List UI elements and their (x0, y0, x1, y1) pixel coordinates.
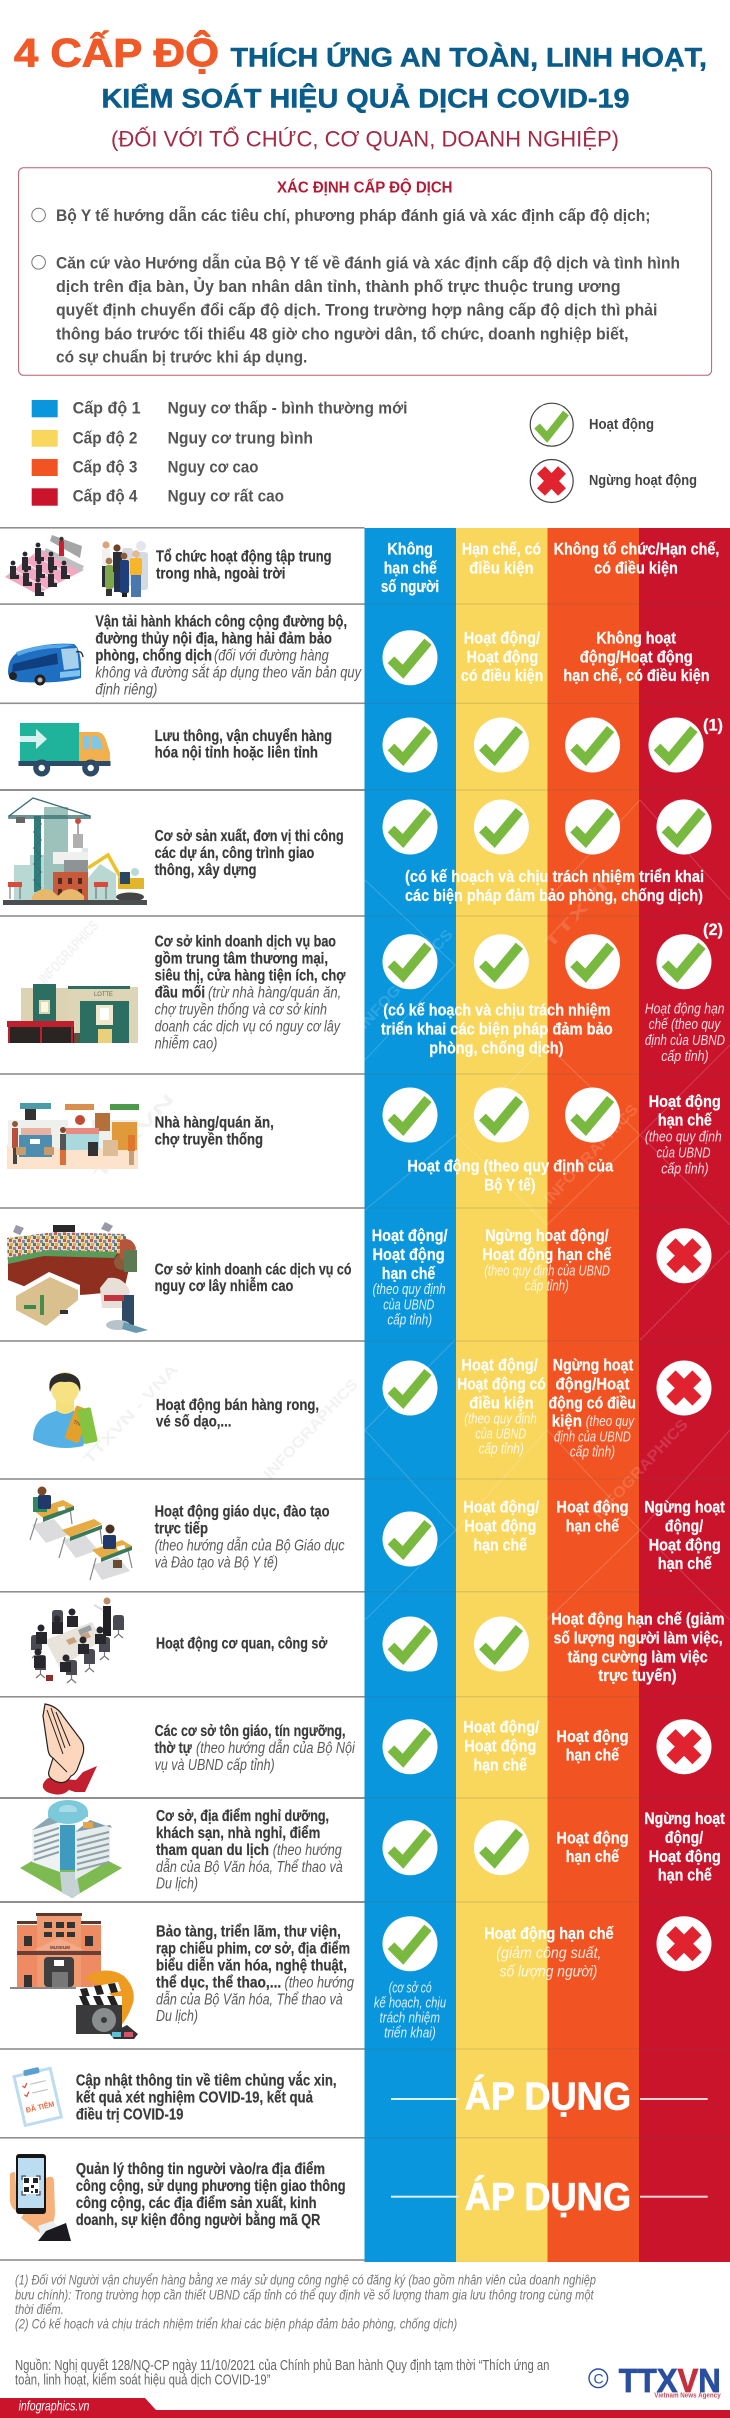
text: INFOGRAPHICS (355, 926, 457, 1033)
row 11 label: vụ và UBND cấp tỉnh) (155, 1757, 275, 1774)
row 6 level cells (382, 1088, 722, 1195)
row 7 level cells: của UBND (383, 1296, 435, 1313)
row 7 level cells: (theo quy định của UBND (484, 1262, 610, 1279)
row 9 label (155, 1504, 345, 1571)
row 5 label: Cơ sở kinh doanh dịch vụ bao (155, 934, 336, 951)
row 13 level cells: số lượng người) (500, 1964, 597, 1981)
row 2 level cells: động/Hoạt động (580, 647, 693, 666)
row 8 level cells: (theo quy (586, 1413, 635, 1430)
row 6 level cells: cấp tỉnh) (661, 1161, 709, 1178)
row 12 level cells: Hoạt động (556, 1828, 629, 1847)
row 9 level cells: hạn chế (474, 1535, 527, 1554)
row 8 label: Hoạt động bán hàng rong, (156, 1397, 319, 1414)
icon: stadium, gym and barber (7, 1222, 148, 1333)
icon: vaccination clipboard (13, 2064, 61, 2125)
row 11 label (155, 1723, 355, 1774)
row 8 label (156, 1397, 319, 1431)
row 3 level cells (382, 716, 723, 772)
row 5 level cells: (2) (703, 920, 723, 939)
row 7 level cells: Hoạt động (372, 1245, 445, 1264)
row 1 level cells (381, 540, 719, 596)
row 4: cơ sở sản xuất (3, 798, 712, 905)
row 2 label: định riêng) (95, 681, 157, 698)
row 8 level cells: định của UBND (554, 1429, 631, 1446)
row 5 level cells (381, 920, 725, 1065)
text: INFOGRAPHICS (35, 918, 102, 988)
row 12 label: dẫn của Bộ Văn hóa, Thể thao và (156, 1859, 343, 1876)
text: INFOGRAPHICS (540, 1101, 642, 1208)
row 2 level cells: Hoạt động/ (464, 628, 540, 647)
text: INFOGRAPHICS (260, 1376, 362, 1483)
legend: levels: Nguy cơ cao (168, 457, 258, 476)
row 5: cơ sở kinh doanh dịch vụ (7, 920, 725, 1065)
row 5 label: nhiễm cao) (155, 1035, 217, 1052)
row 12 level cells (382, 1809, 725, 1885)
row 14 label: điều trị COVID-19 (76, 2107, 183, 2124)
row 15 label: công cộng, sử dụng phương tiện giao thông (76, 2178, 346, 2195)
row 12 label: (theo hướng (273, 1842, 342, 1859)
row 12 level cells: hạn chế (658, 1866, 712, 1885)
row 8 level cells: cấp tỉnh) (570, 1444, 615, 1461)
text: TTXVN - VNA (80, 1361, 182, 1468)
legend: levels: Nguy cơ thấp - bình thường mới (168, 398, 407, 417)
bullet 1 text: Bộ Y tế hướng dẫn các tiêu chí, phương pháp đánh giá và xác định cấp độ dịch; (56, 206, 650, 225)
row 11 level cells: Hoạt động (556, 1727, 629, 1746)
row 2 label: không và đường sắt áp dụng theo văn bản quy (95, 665, 362, 682)
row 13 label: thể dục, thể thao,... (156, 1973, 281, 1991)
row 8 level cells: của UBND (475, 1425, 526, 1442)
row 6 label: chợ truyền thống (155, 1132, 263, 1149)
logo: TTXVN: C (594, 2370, 604, 2386)
row 5 label (155, 934, 346, 1052)
row 6: nhà hàng, chợ truyền thống (7, 1088, 722, 1195)
row 9 level cells: Hoạt động (556, 1497, 629, 1516)
row 9: giáo dục (30, 1486, 725, 1580)
row 4 level cells (382, 800, 712, 905)
footnotes: (2) Có kế hoạch và chịu trách nhiệm triển khai các biện pháp đảm bảo phòng, chống dịch) (15, 2316, 457, 2332)
row 2 label: phòng, chống dịch (95, 648, 212, 665)
row 9 level cells: Hoạt động/ (463, 1497, 539, 1516)
row 9 label: Hoạt động giáo dục, đào tạo (155, 1504, 330, 1521)
source note: toàn, linh hoạt, kiểm soát hiệu quả dịch COVID-19” (15, 2372, 271, 2388)
row 9 level cells: hạn chế (566, 1516, 620, 1535)
row 9 level cells: Hoạt động (464, 1516, 536, 1535)
legend: levels: Nguy cơ trung bình (168, 428, 313, 447)
legend: levels (32, 398, 407, 506)
row 8 level cells: điều kiện (469, 1393, 534, 1412)
row 8 level cells: Ngừng hoạt (553, 1355, 633, 1374)
row 8 level cells: Hoạt động có (457, 1374, 546, 1393)
row 4 label: thông, xây dựng (155, 862, 256, 879)
title: THÍCH ỨNG AN TOÀN, LINH HOẠT, (230, 42, 707, 73)
row 3 label: Lưu thông, vận chuyển hàng (155, 727, 332, 745)
text: INFOGRAPHICS (590, 1416, 692, 1523)
row 8 level cells: cấp tỉnh) (479, 1440, 524, 1457)
row 13 level cells: triển khai) (384, 2025, 436, 2042)
row 13 label: rạp chiếu phim, cơ sở, địa điểm (156, 1939, 350, 1957)
row 5 label: gồm trung tâm thương mại, (155, 951, 328, 968)
row 5 label: doanh các dịch vụ có nguy cơ lây (155, 1019, 341, 1036)
row 9 label: trực tiếp (155, 1520, 208, 1537)
row 12 level cells: động/ (665, 1828, 703, 1847)
row 5 label: đầu mối (155, 985, 205, 1002)
row 1 level cells: hạn chế (384, 558, 437, 577)
icon: museum and film clapper: MUSEUM (50, 1945, 70, 1950)
row 1 level cells: Không (387, 540, 433, 559)
legend: levels: Cấp độ 3 (73, 457, 137, 476)
bullet 2 text: thông báo trước tối thiểu 48 giờ cho người dân, tổ chức, doanh nghiệp biết, (56, 324, 628, 343)
icon: street vendor with tickets: Thưởng (72, 1419, 92, 1431)
row 8 level cells: (theo quy định (464, 1410, 537, 1427)
row 13 level cells: (cơ sở có (389, 1980, 432, 1997)
icon: conference hall (5, 535, 84, 596)
row 13 label: biểu diễn văn hóa, nghệ thuật, (156, 1955, 347, 1974)
title: KIỂM SOÁT HIỆU QUẢ DỊCH COVID-19 (102, 81, 630, 113)
icon: street vendor with tickets (33, 1372, 98, 1448)
footnotes: thời điểm. (15, 2301, 64, 2317)
row 5 level cells: (có kế hoạch và chịu trách nhiệm (383, 1001, 610, 1020)
row 11 level cells (382, 1717, 712, 1774)
text: TTXVN (90, 1091, 178, 1183)
row 1 level cells: điều kiện (469, 558, 534, 577)
row 6 level cells: Bộ Y tế) (484, 1176, 535, 1195)
icon: praying hands (43, 1704, 97, 1795)
row 15 label: Quản lý thông tin người vào/ra địa điểm (76, 2160, 325, 2178)
row 2 label: đường thủy nội địa, hàng hải đảm bảo (95, 631, 332, 648)
row 12 label: Du lịch) (156, 1876, 198, 1893)
row 6 level cells: của UBND (656, 1145, 711, 1162)
icon: office meeting (31, 1598, 124, 1683)
source note: Nguồn: Nghị quyết 128/NQ-CP ngày 11/10/2021 của Chính phủ Ban hành Quy định tạm thời “Thích ứng an (15, 2358, 549, 2374)
row 10 level cells: tăng cường làm việc (568, 1648, 708, 1667)
row 13 label: dẫn của Bộ Văn hóa, Thể thao và (156, 1991, 343, 2008)
row 7 level cells (372, 1226, 712, 1328)
icon: museum and film clapper (10, 1913, 138, 2039)
level colour columns (364, 528, 730, 2262)
row 5 level cells: triển khai các biện pháp đảm bảo (381, 1020, 613, 1039)
row 4 label (155, 828, 344, 879)
row 12 label: khách sạn, nhà nghỉ, điểm (156, 1824, 320, 1842)
legend: symbols: Hoạt động (589, 417, 654, 433)
row 9 label: và Đào tạo và Bộ Y tế) (155, 1554, 278, 1571)
row 2 level cells: có điều kiện (461, 666, 543, 685)
row 9 level cells (382, 1497, 725, 1573)
row 15 label: công cộng, các địa điểm sản xuất, kinh (76, 2194, 317, 2212)
row 7 label: Cơ sở kinh doanh các dịch vụ có (155, 1261, 352, 1278)
row 11 label: thờ tự (155, 1740, 192, 1757)
row 2 level cells: Không hoạt (596, 628, 676, 647)
icon: shopping mall (7, 984, 138, 1043)
row 7 label (155, 1261, 352, 1295)
bullet 2 text: quyết định chuyển đổi cấp độ dịch. Trong trường hợp nâng cấp độ dịch thì phải (56, 301, 657, 320)
row 5 label: (trừ nhà hàng/quán ăn, (208, 985, 341, 1002)
legend: symbols (530, 403, 697, 502)
row 7: dịch vụ nguy cơ lây nhiễm cao (7, 1222, 712, 1333)
legend: levels: Cấp độ 2 (73, 428, 137, 447)
row 6 level cells: Hoạt động (theo quy định của (407, 1157, 614, 1176)
row 1 level cells: số người (381, 577, 439, 596)
legend: levels: Cấp độ 1 (73, 398, 141, 417)
row 13 level cells: (giảm công suất, (496, 1945, 602, 1962)
row 13 label: (theo hướng (284, 1974, 354, 1991)
row 8 level cells: động có điều (548, 1393, 636, 1412)
row 8 level cells (382, 1355, 712, 1461)
row 3: lưu thông hàng hóa (18, 716, 723, 776)
row 12 label: Cơ sở, địa điểm nghỉ dưỡng, (156, 1807, 329, 1825)
row 5 label: siêu thị, cửa hàng tiện ích, chợ (155, 968, 346, 985)
title: (ĐỐI VỚI TỔ CHỨC, CƠ QUAN, DOANH NGHIỆP) (111, 126, 619, 152)
bullet 2 text: dịch trên địa bàn, Ủy ban nhân dân tỉnh, thành phố trực thuộc trung ương (56, 277, 621, 296)
title: 4 CẤP ĐỘ (14, 30, 219, 76)
row 9 level cells: hạn chế (658, 1554, 712, 1573)
row 7 level cells: Hoạt động hạn chế (482, 1245, 612, 1264)
row 2 level cells: Hoạt động (466, 647, 538, 666)
row 13 label (156, 1922, 354, 2025)
icon: market stalls (7, 1103, 139, 1169)
row 2: vận tải hành khách (8, 614, 710, 698)
row 14: cập nhật tiêm chủng (13, 2064, 708, 2125)
row 11 label: (theo hướng dẫn của Bộ Nội (196, 1740, 355, 1757)
row 1 label: Tổ chức hoạt động tập trung (156, 548, 332, 566)
row 1 level cells: có điều kiện (594, 558, 678, 577)
icon: shopping mall: LOTTE (94, 992, 113, 998)
logo: TTXVN: TTXVN (619, 2362, 721, 2399)
row 11: tôn giáo (43, 1704, 712, 1795)
row 14 label: kết quả xét nghiệm COVID-19, kết quả (76, 2090, 313, 2107)
legend: levels: Nguy cơ rất cao (168, 487, 284, 506)
row 15 applies: ÁP DỤNG (465, 2175, 631, 2219)
row 15: quản lý QR (10, 2154, 708, 2241)
row 5 level cells: cấp tỉnh) (661, 1048, 709, 1065)
row 10 level cells: trực tuyến) (598, 1666, 676, 1685)
row 13 label: Bảo tàng, triển lãm, thư viện, (156, 1922, 341, 1940)
row 8: bán hàng rong (33, 1355, 712, 1461)
row 15 label (76, 2160, 346, 2229)
row 10 label: Hoạt động cơ quan, công sở (156, 1635, 328, 1652)
bullet 1 (32, 208, 45, 222)
row 10 level cells (382, 1610, 724, 1685)
row 12 label (156, 1807, 343, 1893)
icon: hotel building (20, 1800, 122, 1898)
row 8 level cells: kiện (552, 1412, 582, 1431)
bullet 2 (32, 255, 45, 269)
row 8 label: vé số dạo,... (156, 1414, 231, 1431)
row 6 label: Nhà hàng/quán ăn, (155, 1114, 274, 1131)
icon: phone with QR code (10, 2154, 71, 2241)
row 1 label: trong nhà, ngoài trời (156, 566, 285, 583)
title (14, 30, 707, 152)
footer band: infographics.vn (19, 2398, 90, 2414)
row 11 level cells: hạn chế (474, 1755, 527, 1774)
row 12 label: tham quan du lịch (156, 1842, 269, 1859)
icon: vaccination clipboard: ĐÃ TIÊM (25, 2099, 55, 2115)
row 7 level cells: hạn chế (382, 1264, 436, 1283)
icon: truck (18, 723, 110, 776)
icon: students at desks (30, 1486, 132, 1580)
row 13: bảo tàng, rạp chiếu phim (10, 1913, 712, 2042)
footer band (0, 2398, 730, 2418)
row 9 level cells: động/ (665, 1516, 703, 1535)
icon: construction site (3, 798, 147, 905)
row 7 level cells: cấp tỉnh) (525, 1278, 569, 1295)
row 1 level cells: Hạn chế, có (462, 540, 541, 559)
row 15 label: doanh, sự kiện đông người bằng mã QR (76, 2210, 321, 2229)
row 6 level cells: hạn chế (658, 1111, 712, 1130)
icon: bus (8, 644, 83, 686)
bullet 2 text: có sự chuẩn bị trước khi áp dụng. (56, 348, 307, 367)
row 14 label (76, 2071, 337, 2124)
row 8 level cells: động/Hoạt (556, 1374, 630, 1393)
row 2 label: Vận tải hành khách công cộng đường bộ, (95, 614, 347, 631)
row 7 level cells: Ngừng hoạt động/ (485, 1226, 609, 1245)
icon: group of people (102, 541, 148, 597)
row 2 level cells (382, 628, 710, 685)
row 13 label: Du lịch) (156, 2008, 198, 2025)
row 1: tổ chức hoạt động (5, 535, 719, 597)
legend: levels: Cấp độ 4 (73, 487, 138, 506)
row 2 label (95, 614, 362, 698)
panel heading: XÁC ĐỊNH CẤP ĐỘ DỊCH (277, 177, 452, 196)
row 7 level cells: Hoạt động/ (372, 1226, 448, 1245)
row 5 level cells: phòng, chống dịch) (429, 1039, 563, 1058)
row 7 level cells: (theo quy định (372, 1281, 446, 1298)
legend: symbols: Ngừng hoạt động (589, 473, 697, 489)
row 6 label (155, 1114, 274, 1149)
row 4 label: các dự án, công trình giao (155, 845, 314, 862)
row 12 level cells: hạn chế (566, 1847, 620, 1866)
row 13 level cells: Hoạt động hạn chế (484, 1924, 614, 1943)
row 11 label: Các cơ sở tôn giáo, tín ngưỡng, (155, 1723, 346, 1740)
row 1 label (156, 548, 332, 583)
row 3 label (155, 727, 332, 762)
source note (15, 2358, 549, 2388)
row 12: nghỉ dưỡng, du lịch (20, 1800, 725, 1898)
row 10: cơ quan, công sở (31, 1598, 724, 1685)
bullet 2 text: Căn cứ vào Hướng dẫn của Bộ Y tế về đánh giá và xác định cấp độ dịch và tình hình (56, 253, 680, 272)
row 13 level cells: kế hoạch, chịu (374, 1995, 447, 2012)
row 13 level cells: trách nhiệm (380, 2010, 440, 2027)
row 7 label: nguy cơ lây nhiễm cao (155, 1276, 293, 1295)
row 14 label: Cập nhật thông tin về tiêm chủng vắc xin, (76, 2071, 337, 2090)
row 7 level cells: cấp tỉnh) (387, 1311, 432, 1328)
row 11 level cells: Hoạt động (464, 1736, 536, 1755)
text: TTXVN (540, 868, 621, 953)
row 4 label: Cơ sở sản xuất, đơn vị thi công (155, 828, 344, 845)
row 14 applies: ÁP DỤNG (465, 2074, 631, 2118)
footnotes (15, 2272, 596, 2332)
bullet 2 text (56, 253, 680, 367)
panel: xác định cấp độ dịch (19, 168, 712, 375)
row 5 label: chợ truyền thống và cơ sở kinh (155, 1002, 327, 1019)
row 3 level cells: (1) (703, 716, 723, 735)
row 11 level cells: hạn chế (566, 1746, 620, 1765)
row 2 label: (đối với đường hàng (214, 648, 329, 665)
row 9 label: (theo hướng dẫn của Bộ Giáo dục (155, 1537, 345, 1554)
row 13 level cells (374, 1916, 712, 2042)
footnotes: bưu chính): Trong trường hợp cần thiết UBND cấp tỉnh có thể quy định về số lượng tham gia lưu thông trong cùng một (15, 2286, 594, 2302)
row 3 label: hóa nội tỉnh hoặc liên tỉnh (155, 745, 318, 762)
row 8 level cells: Hoạt động/ (461, 1355, 538, 1374)
row 11 level cells: Hoạt động/ (463, 1717, 539, 1736)
